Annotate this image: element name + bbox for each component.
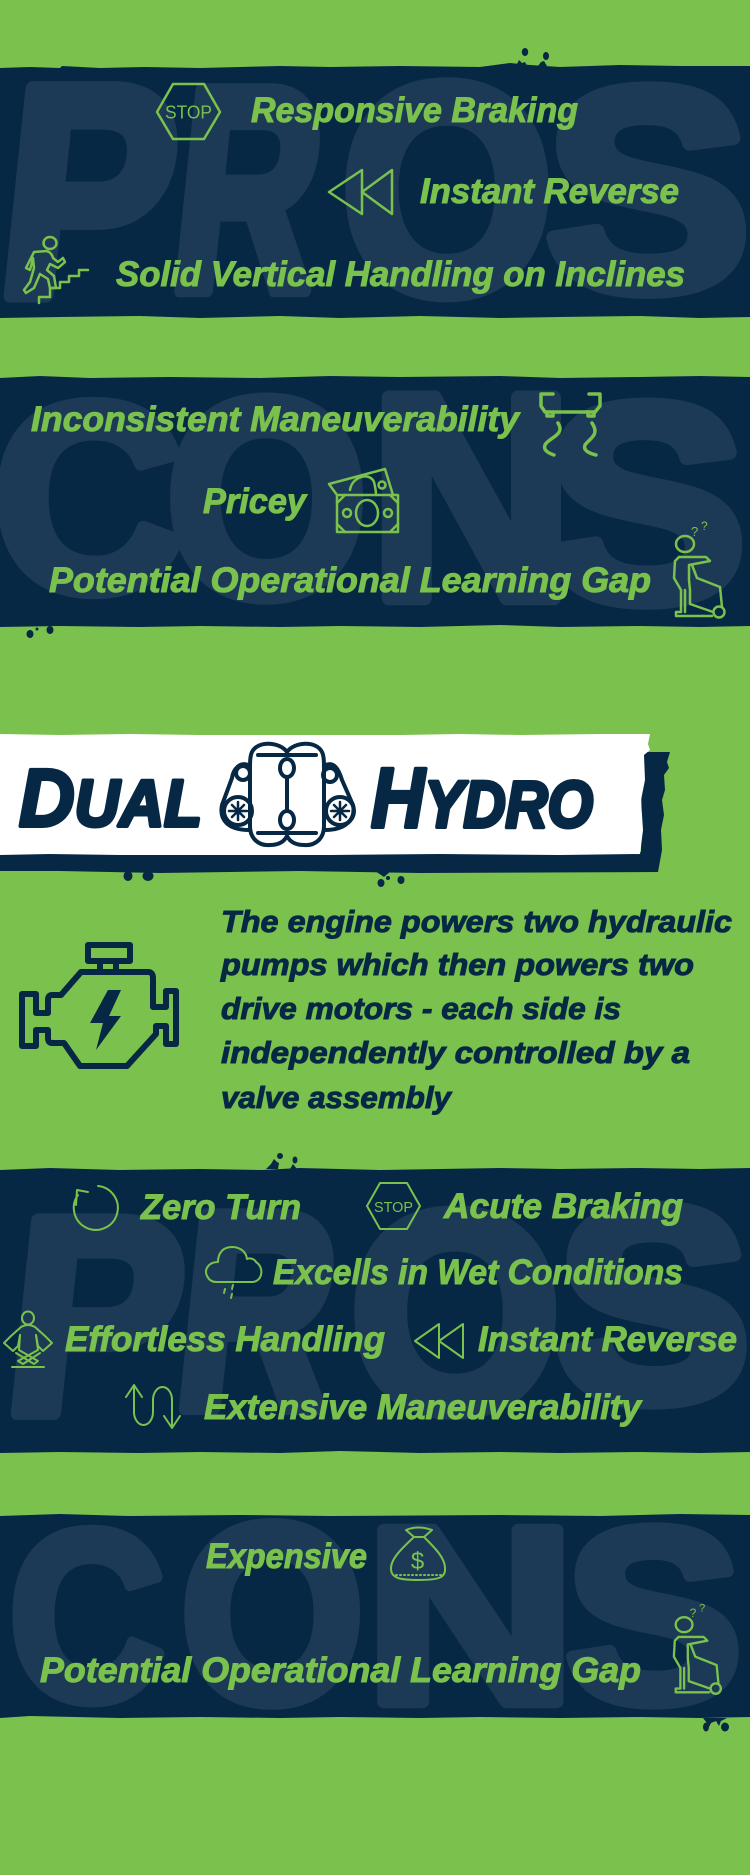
watermark: CONS: O [180,1472,364,1755]
title word: hydro: HYDRO [371,751,593,845]
watermark: PROS [0,1151,750,1473]
icon: money bag: $ [411,1548,424,1575]
text: engine description: independently controlled by a [221,1035,690,1070]
panel: top pros [0,24,750,359]
text: engine description: drive motors - each side is [221,991,621,1026]
text: engine description [220,904,732,1115]
watermark: CONS: S [565,1479,742,1754]
watermark: PROS: S [545,31,750,351]
text: engine description: pumps which then powers two [220,947,694,982]
text: inconsistent maneuverability: Inconsistent Maneuverability [31,400,521,439]
splatter: bottom cons [703,1718,729,1732]
icon: dual hydro engine [221,744,354,845]
watermark: CONS: S [545,346,746,660]
icon: stop sign [157,84,220,139]
watermark: PROS: O [350,1154,561,1470]
panel: top cons [0,335,750,660]
icon: up and down arrows [126,1385,180,1428]
watermark: PROS: O [341,24,553,356]
icon: meditating person [4,1312,52,1367]
text: excells in wet conditions: Excells in Wet Conditions [273,1253,683,1292]
text: solid vertical handling: Solid Vertical Handling on Inclines [116,255,685,294]
text: responsive braking: Responsive Braking [251,91,578,130]
panel: bottom pros [0,1151,750,1473]
text: zero turn: Zero Turn [140,1188,301,1227]
text: potential operational learning gap: Potential Operational Learning Gap [49,561,651,600]
splatter: bottom pros [266,1153,298,1169]
icon: confused scooter rider: ? [701,519,708,533]
watermark: CONS: N [365,1476,576,1755]
text: acute braking: Acute Braking [443,1187,683,1226]
watermark: CONS: C [9,1482,165,1751]
splatter: top pros [516,48,549,66]
text: engine description: valve assembly [221,1080,453,1115]
text: instant reverse: Instant Reverse [478,1320,737,1359]
icon: confused scooter rider: ? [699,1602,705,1615]
icon: person climbing stairs [24,237,88,303]
watermark: PROS: R [160,28,338,351]
text: potential operational learning gap: Potential Operational Learning Gap [40,1651,641,1690]
icon: money bag [391,1528,445,1580]
text: pricey: Pricey [203,482,307,521]
watermark: CONS [9,1472,742,1755]
panel: bottom cons [0,1472,750,1755]
title banner [0,734,670,887]
text: instant reverse: Instant Reverse [420,172,679,211]
watermark: PROS: R [164,1155,352,1468]
watermark: PROS [0,24,750,359]
icon: stop sign: STOP [374,1199,413,1216]
icon: confused scooter rider [674,519,724,618]
icon: banknotes [329,469,398,532]
icon: rewind [329,170,392,214]
text: expensive: Expensive [206,1537,367,1576]
icon: confused scooter rider: ? [691,524,698,539]
icon: confused scooter rider [674,1602,721,1694]
icon: zero turn [74,1186,118,1230]
watermark: PROS: S [556,1151,750,1459]
watermark: CONS: N [370,335,573,660]
icon: slippery road [541,394,600,455]
text: extensive maneuverability: Extensive Maneuverability [204,1388,643,1427]
watermark: CONS [0,335,746,660]
watermark: CONS: O [166,343,367,655]
splatter: top cons [26,626,54,638]
icon: confused scooter rider: ? [690,1606,697,1620]
icon: stop sign [367,1183,420,1229]
title word: dual: DUAL [19,753,202,844]
text: effortless handling: Effortless Handling [65,1320,385,1359]
icon: stop sign: STOP [165,102,212,122]
icon: rain cloud [206,1247,261,1298]
splatter: banner [124,871,404,887]
icon: rewind [415,1324,463,1358]
text: engine description: The engine powers two hydraulic [221,904,732,939]
icon: engine warning [22,945,176,1066]
